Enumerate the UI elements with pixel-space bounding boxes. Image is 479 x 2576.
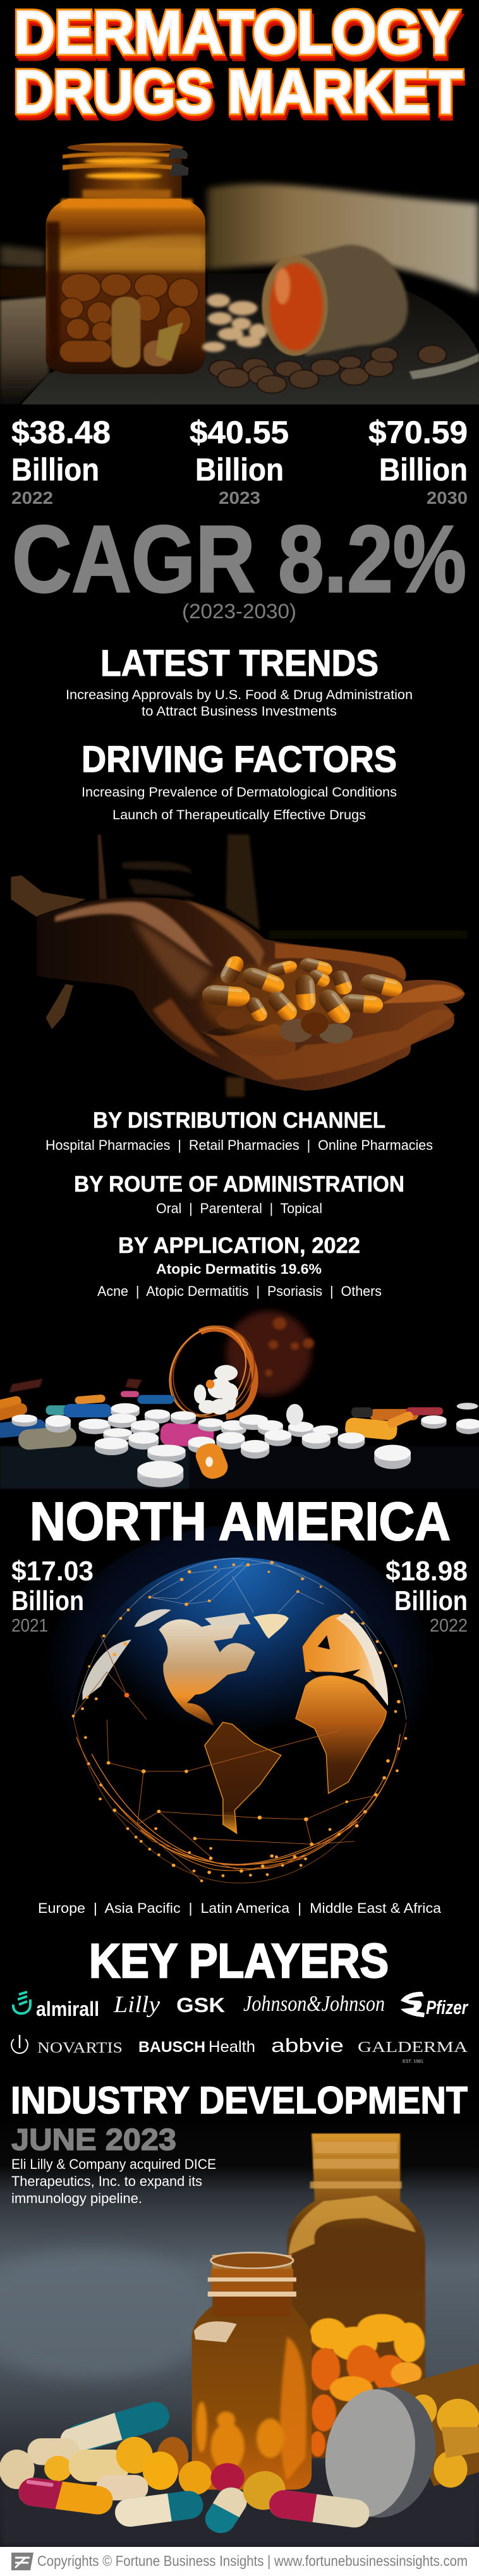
logo: AbbVie: abbvie — [271, 2034, 344, 2056]
stat: north america 2021: $17.03 — [11, 1556, 94, 1587]
text: other regions: Europe | Asia Pacific | Latin America | Middle East & Africa — [38, 1900, 442, 1916]
text: leading application share: Atopic Dermatitis 19.6% — [156, 1261, 322, 1277]
logo: almirall — [13, 1992, 99, 2020]
stat: 2023 market size: Billion — [195, 452, 284, 487]
photo: hand holding amber capsules — [11, 834, 468, 1097]
stat: 2023 market size: 2023 — [219, 488, 260, 508]
logo: Bausch Health: Health — [209, 2038, 255, 2056]
globe with network lines — [43, 1525, 437, 1883]
text: latest trends body — [66, 688, 413, 719]
stat: 2030 market size — [368, 415, 468, 508]
landmass: south america — [205, 1722, 281, 1833]
stat: north america 2021: Billion — [11, 1585, 84, 1616]
stat: north america 2022 — [385, 1556, 468, 1636]
text: latest trends body: Increasing Approvals by U.S. Food & Drug Administration — [66, 688, 413, 702]
heading: latest trends: LATEST TRENDS — [100, 643, 379, 684]
stat: north america 2022: 2022 — [430, 1616, 468, 1636]
logo: Galderma — [358, 2039, 468, 2064]
text: driving factors body: Increasing Prevalence of Dermatological Conditions — [82, 785, 397, 800]
logo: Novartis — [11, 2035, 123, 2056]
stat: 2022 market size: $38.48 — [11, 415, 111, 450]
heading: north america: NORTH AMERICA — [30, 1492, 451, 1552]
title — [14, 0, 463, 131]
photo: amber bottles with colourful capsules — [0, 2083, 479, 2547]
logo: Bausch Health: BAUSCH — [138, 2039, 205, 2056]
stat: 2030 market size: $70.59 — [368, 415, 468, 450]
text: latest trends body: to Attract Business Investments — [142, 704, 337, 719]
heading: driving factors: DRIVING FACTORS — [82, 739, 397, 780]
text: driving factors body — [82, 785, 397, 822]
landmass: africa — [296, 1676, 387, 1793]
stat: 2030 market size: Billion — [379, 452, 468, 487]
title: DERMATOLOGY — [15, 1, 459, 69]
logo: Pfizer: Pfizer — [426, 1996, 469, 2018]
photo: spilled bottle with tablets and capsules — [0, 1311, 479, 1489]
CAGR period: (2023-2030) — [182, 600, 296, 623]
logo: Galderma: GALDERMA — [358, 2039, 468, 2056]
title: DERMATOLOGY — [17, 4, 461, 71]
text: routes: Oral | Parenteral | Topical — [156, 1200, 322, 1216]
stat: north america 2021 — [11, 1556, 94, 1636]
stat: 2022 market size: Billion — [11, 452, 99, 487]
logo: Lilly: Lilly — [113, 1992, 161, 2018]
text: applications: Acne | Atopic Dermatitis | Psoriasis | Others — [97, 1283, 382, 1299]
stat: north america 2022: Billion — [394, 1585, 468, 1616]
text: distribution channels: Hospital Pharmacies | Retail Pharmacies | Online Pharmacies — [45, 1137, 433, 1153]
logo: GSK: GSK — [176, 1994, 225, 2017]
stat: north america 2021: 2021 — [11, 1616, 48, 1636]
text: industry development body: immunology pipeline. — [11, 2190, 142, 2206]
stat: north america 2022: $18.98 — [385, 1556, 468, 1587]
heading: by distribution channel: BY DISTRIBUTION CHANNEL — [93, 1108, 385, 1133]
stat: 2022 market size — [11, 415, 111, 508]
stat: 2030 market size: 2030 — [427, 488, 468, 508]
footer — [0, 2547, 479, 2576]
stat: 2023 market size: $40.55 — [190, 415, 289, 450]
logo: Johnson & Johnson: Johnson&Johnson — [243, 1991, 385, 2016]
logo: almirall: almirall — [36, 1998, 99, 2020]
logo: Novartis: NOVARTIS — [37, 2040, 123, 2056]
stat: 2023 market size — [190, 415, 289, 508]
logo: Pfizer — [401, 1992, 469, 2018]
text: industry development body: Therapeutics, Inc. to expand its — [11, 2173, 202, 2189]
landmass: north and central america — [159, 1620, 255, 1726]
heading: by route of administration: BY ROUTE OF ADMINISTRATION — [74, 1172, 404, 1197]
date: June 2023: JUNE 2023 — [11, 2123, 176, 2157]
text: industry development body: Eli Lilly & Company acquired DICE — [11, 2156, 216, 2172]
text: driving factors body: Launch of Therapeutically Effective Drugs — [112, 808, 366, 822]
icon: Fortune Business Insights logo — [11, 2553, 33, 2570]
logo: Bausch Health — [138, 2038, 255, 2056]
heading: by application: BY APPLICATION, 2022 — [118, 1233, 360, 1258]
logo: Galderma: EST. 1981 — [403, 2060, 423, 2064]
heading: key players: KEY PLAYERS — [89, 1934, 389, 1988]
text: industry development body — [11, 2156, 216, 2206]
photo: amber bottle with spilled pills — [0, 142, 479, 405]
stat: 2022 market size: 2022 — [11, 488, 53, 508]
